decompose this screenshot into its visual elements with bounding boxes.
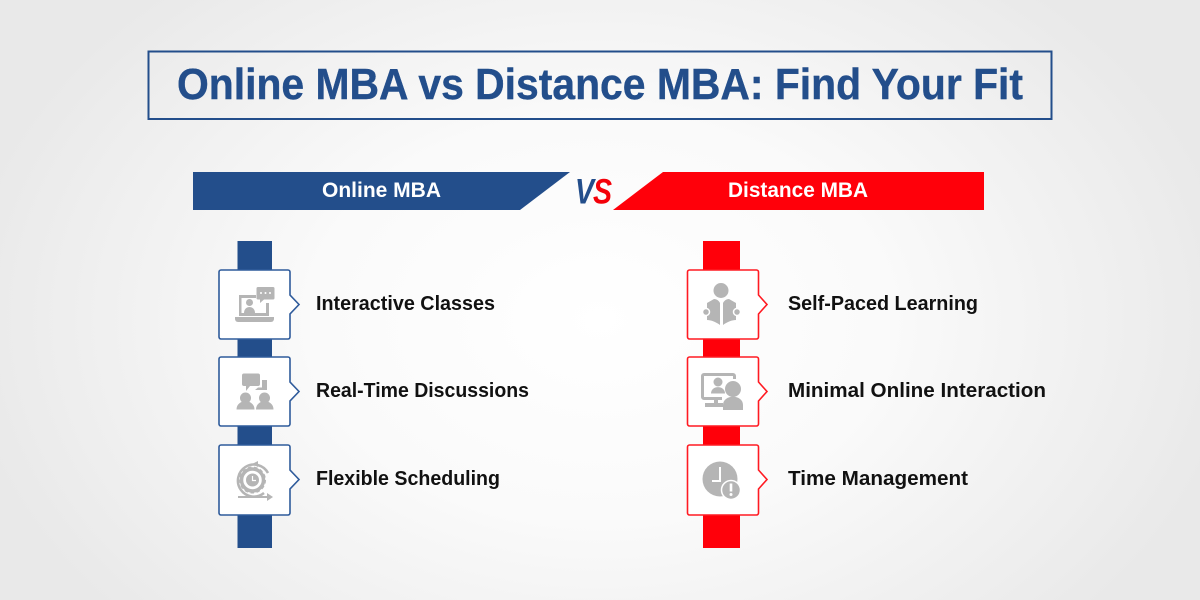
VS badge: V (575, 172, 596, 212)
panel: Online MBA column (219, 241, 529, 548)
VS badge (575, 172, 612, 212)
header: Distance MBA: Distance MBA (728, 179, 868, 202)
icon: reader with book (702, 283, 740, 325)
title: Online MBA vs Distance MBA: Find Your Fit (177, 60, 1023, 109)
stem: distance (703, 241, 740, 548)
icon: clock in gear cycle (238, 461, 273, 501)
item: Time Management (688, 445, 968, 515)
item: Self-Paced Learning (688, 270, 978, 339)
label: Minimal Online Interaction (788, 379, 1046, 402)
header: Online MBA (193, 172, 570, 210)
label: Interactive Classes (316, 292, 495, 315)
item: Flexible Scheduling (219, 445, 500, 515)
icon: clock with alert (702, 462, 740, 500)
label: Flexible Scheduling (316, 467, 500, 490)
header: Distance MBA (613, 172, 984, 210)
title (148, 52, 1052, 119)
label: Time Management (788, 467, 968, 490)
panel: Distance MBA column (688, 241, 1046, 548)
VS badge: S (593, 172, 612, 212)
header: Online MBA: Online MBA (322, 179, 441, 202)
label: Real-Time Discussions (316, 379, 529, 402)
item: Minimal Online Interaction (688, 357, 1046, 426)
item: Interactive Classes (219, 270, 495, 339)
stem: online (238, 241, 272, 548)
item: Real-Time Discussions (219, 357, 529, 426)
label: Self-Paced Learning (788, 292, 978, 315)
icon: laptop with chat (235, 287, 274, 322)
icon: people talking (236, 374, 274, 410)
icon: monitor with people (701, 373, 743, 410)
